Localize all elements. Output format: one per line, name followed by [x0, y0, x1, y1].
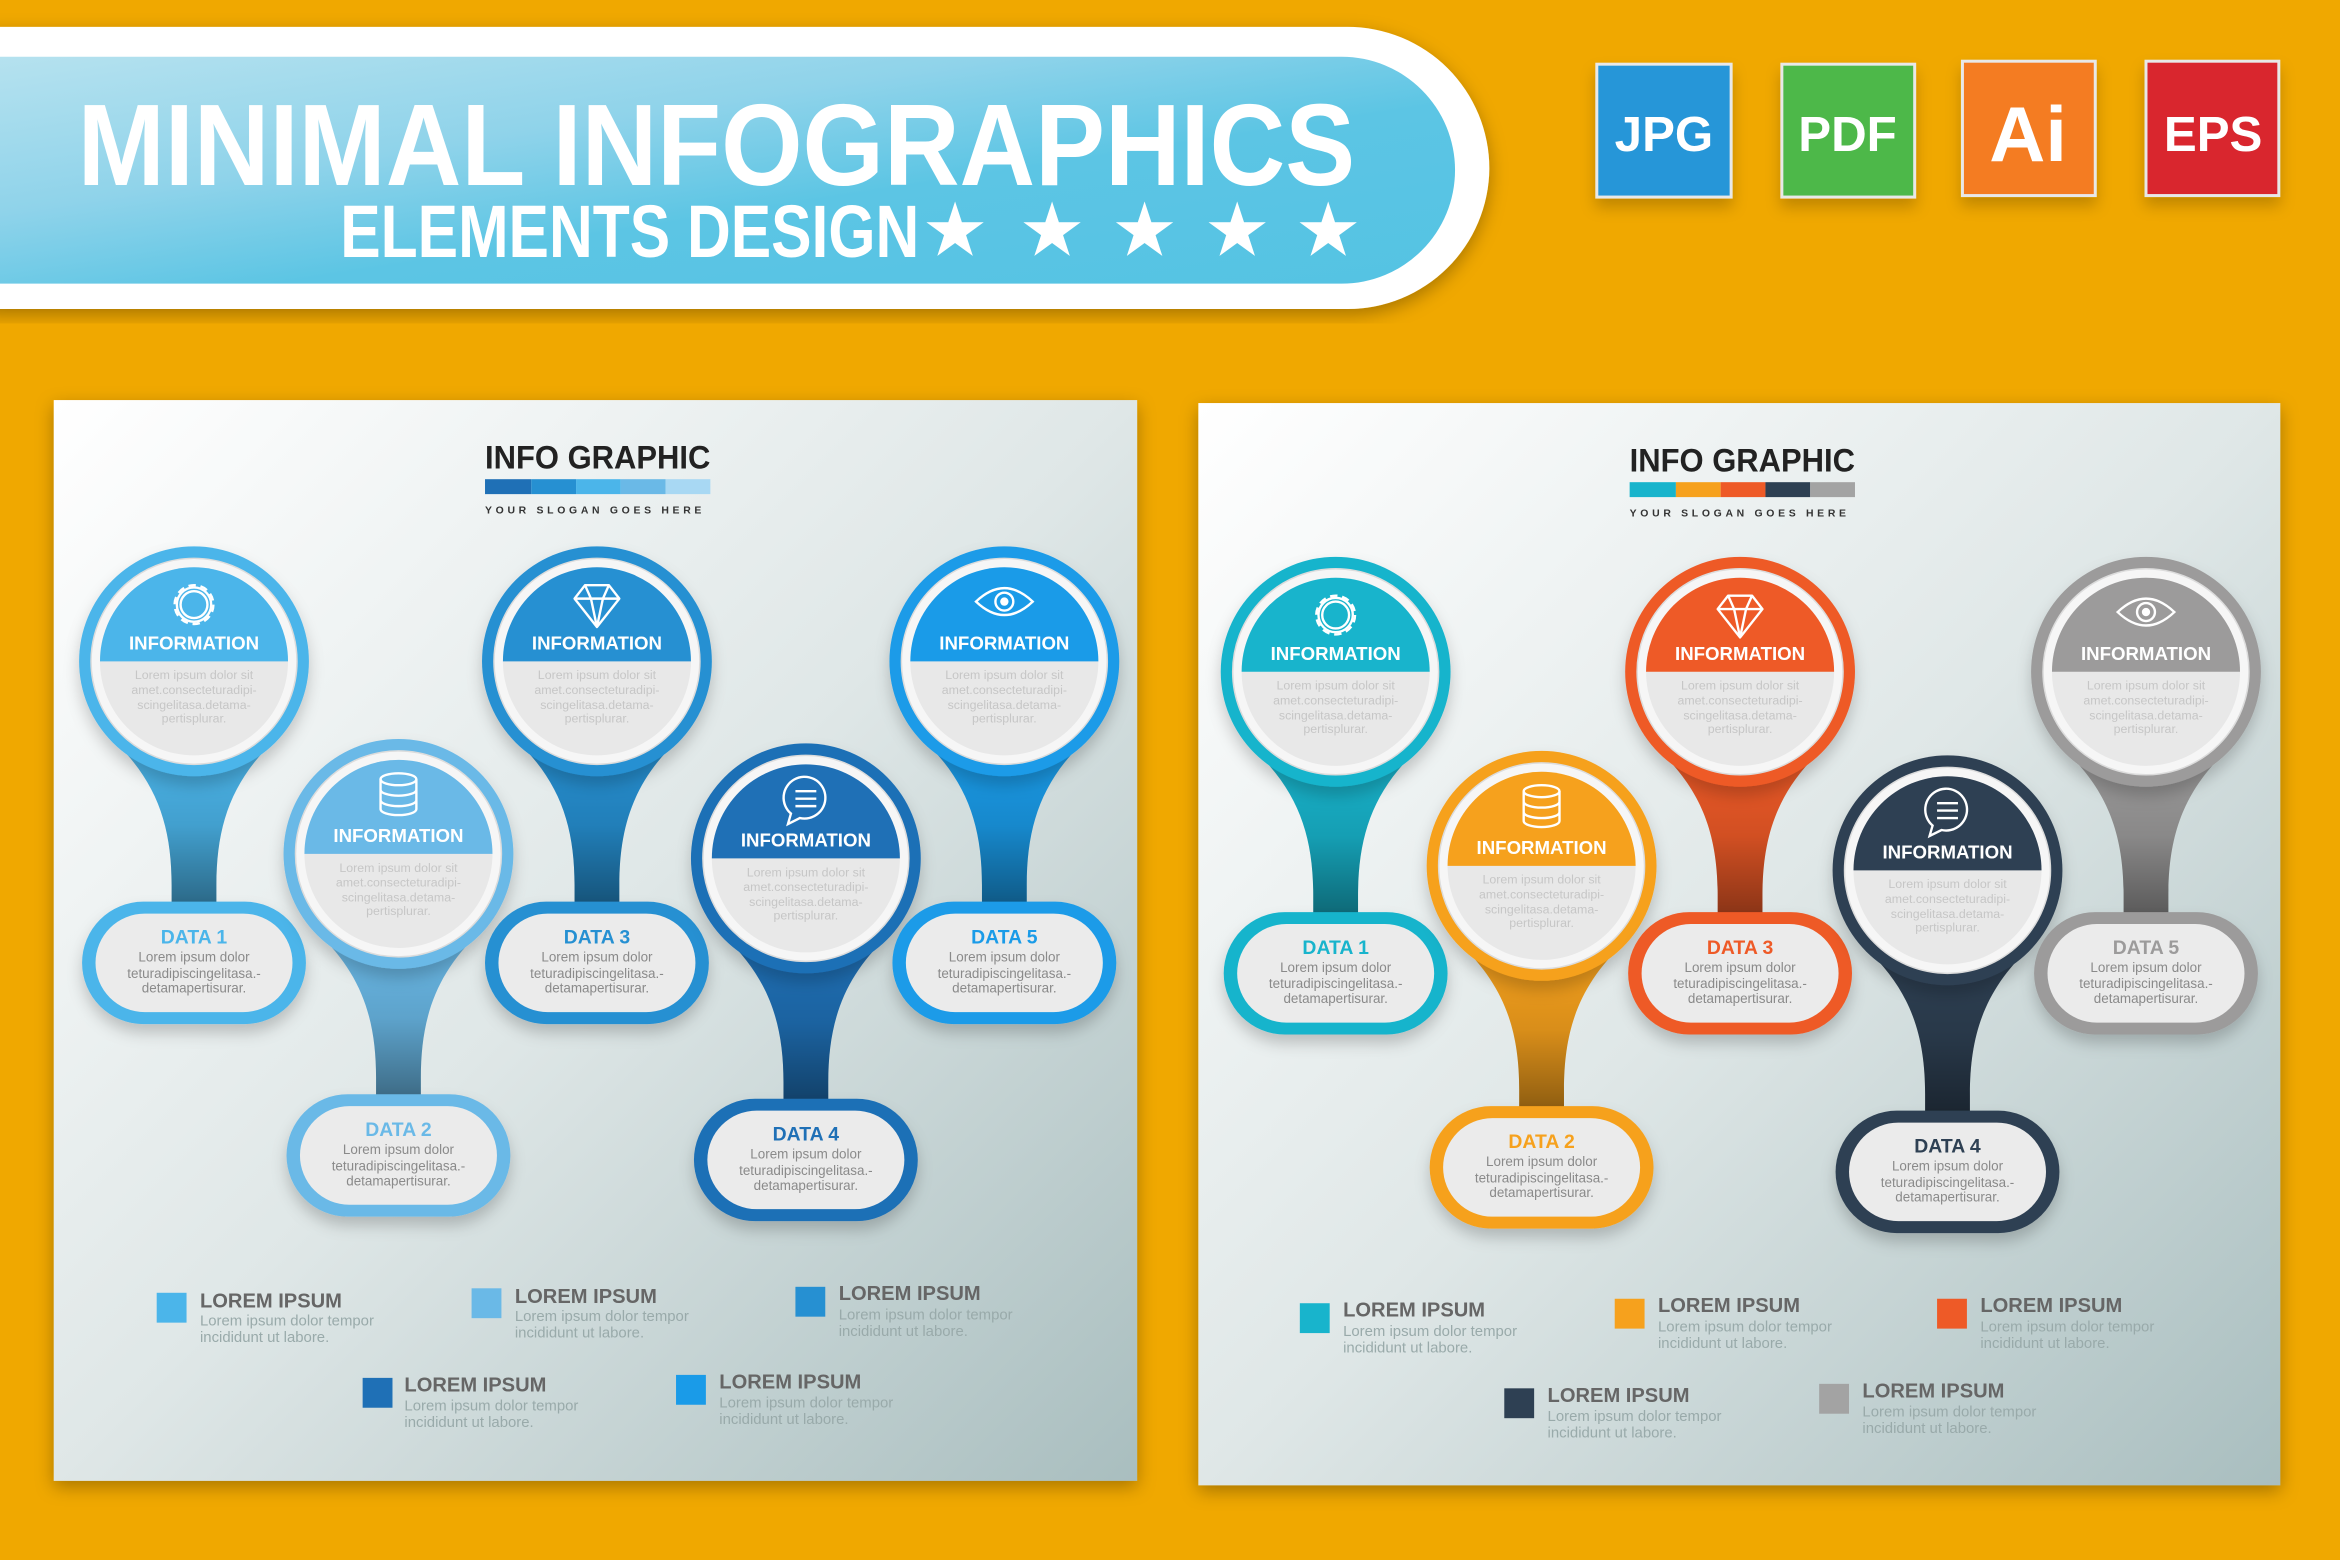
panel: blue infographic [54, 400, 1137, 1481]
icon: diamond [1718, 596, 1762, 637]
pin 5 (eye): Lorem ipsum dolor [949, 949, 1060, 964]
pin 5 (eye): Lorem ipsum dolor sit [945, 668, 1064, 682]
pin 4 (chat): teturadipiscingelitasa.- [739, 1163, 873, 1178]
pin 2 orange: Lorem ipsum dolor sit [1482, 873, 1601, 887]
legend: colorful panel: LOREM IPSUM [1343, 1300, 1485, 1322]
icon: diamond [575, 585, 619, 627]
pin 1 (gear): amet.consecteturadipi- [131, 683, 257, 697]
legend: blue panel: Lorem ipsum dolor tempor [200, 1313, 374, 1330]
pin 5 (eye): detamapertisurar. [952, 981, 1057, 996]
pin 3 (diamond): Lorem ipsum dolor [541, 949, 653, 964]
pin 3 (diamond): Lorem ipsum dolor sit [538, 668, 657, 682]
pin 4 navy: amet.consecteturadipi- [1885, 892, 2010, 906]
pin 3 (diamond): DATA 3 [564, 926, 630, 948]
subtitle: elements design with stars: ★ [1295, 186, 1362, 273]
subtitle: elements design with stars: ★ [1111, 186, 1178, 273]
legend: colorful panel: incididunt ut labore. [1862, 1420, 1992, 1437]
pin 2 (database): teturadipiscingelitasa.- [332, 1158, 465, 1173]
legend: blue panel: LOREM IPSUM [839, 1283, 981, 1305]
pin 3 (diamond): scingelitasa.detama- [540, 698, 654, 712]
pin 3 red: scingelitasa.detama- [1683, 709, 1797, 723]
pin 5 (eye): scingelitasa.detama- [948, 698, 1061, 712]
pin 4 navy: detamapertisurar. [1895, 1190, 2000, 1205]
pin 2 (database): INFORMATION [333, 825, 464, 846]
legend: colorful panel: Lorem ipsum dolor tempor [1862, 1404, 2036, 1421]
pin 5 gray: INFORMATION [2081, 643, 2211, 664]
pin 2 (database): Lorem ipsum dolor sit [339, 861, 458, 875]
subtitle: elements design with stars: ★ [1019, 186, 1086, 273]
pin 2 orange: pertisplurar. [1509, 916, 1574, 930]
legend: blue panel: incididunt ut labore. [515, 1325, 644, 1342]
pin 1 teal: Lorem ipsum dolor sit [1277, 679, 1395, 693]
pin 4 navy: INFORMATION [1882, 841, 2013, 862]
legend: blue panel: incididunt ut labore. [404, 1414, 534, 1431]
pin 1 (gear): pertisplurar. [162, 712, 226, 726]
pin 3 red: amet.consecteturadipi- [1677, 694, 1803, 708]
legend: blue panel: LOREM IPSUM [719, 1371, 861, 1393]
panel title: YOUR SLOGAN GOES HERE [485, 506, 706, 517]
pin 4 (chat): detamapertisurar. [754, 1178, 858, 1193]
pin 3 red: Lorem ipsum dolor sit [1681, 679, 1800, 693]
pin 1 (gear) [79, 546, 309, 1024]
pin 2 orange: INFORMATION [1477, 837, 1607, 858]
pin 1 (gear): Lorem ipsum dolor sit [135, 668, 254, 682]
pin 2 orange: DATA 2 [1508, 1131, 1575, 1153]
pin 3 (diamond): detamapertisurar. [545, 981, 649, 996]
pin 4 navy: DATA 4 [1914, 1135, 1981, 1157]
panel title [1630, 442, 1855, 520]
pin 4 (chat): Lorem ipsum dolor [750, 1146, 862, 1161]
legend: colorful panel: Lorem ipsum dolor tempor [1658, 1319, 1832, 1336]
legend: blue panel: LOREM IPSUM [515, 1286, 657, 1308]
pin 4 navy: scingelitasa.detama- [1891, 907, 2004, 921]
legend: colorful panel [1300, 1295, 2154, 1442]
legend: colorful panel: Lorem ipsum dolor tempor [1343, 1323, 1517, 1340]
pin 3 red: teturadipiscingelitasa.- [1673, 976, 1807, 991]
pin 2 orange: amet.consecteturadipi- [1479, 888, 1604, 902]
icon: database [381, 773, 416, 815]
icon: gear [1316, 596, 1355, 634]
icon: eye [976, 588, 1033, 615]
legend: colorful panel: LOREM IPSUM [1548, 1385, 1690, 1407]
pin 2 orange: detamapertisurar. [1489, 1185, 1594, 1200]
icon: EPS [2146, 61, 2279, 196]
pin 2 orange: Lorem ipsum dolor [1486, 1154, 1598, 1169]
pin 4 (chat) [691, 743, 921, 1221]
pin 4 (chat): pertisplurar. [774, 909, 838, 923]
panel title [485, 439, 710, 517]
icon: JPG [1597, 64, 1731, 197]
pin 2 (database) [284, 739, 513, 1217]
pin 2 (database): DATA 2 [365, 1119, 432, 1141]
panel title: INFO GRAPHIC [485, 439, 710, 476]
pin 4 navy: Lorem ipsum dolor [1892, 1158, 2004, 1173]
pin 3 (diamond): amet.consecteturadipi- [534, 683, 660, 697]
pin 3 (diamond) [482, 546, 712, 1024]
legend: colorful panel: incididunt ut labore. [1343, 1339, 1472, 1356]
icon: JPG: JPG [1615, 107, 1713, 162]
legend: colorful panel: incididunt ut labore. [1980, 1335, 2110, 1352]
panel: colorful infographic [1198, 403, 2280, 1485]
pin 5 gray: amet.consecteturadipi- [2083, 694, 2209, 708]
pin 2 (database): amet.consecteturadipi- [336, 876, 461, 890]
pin 3 (diamond): teturadipiscingelitasa.- [530, 966, 664, 981]
pin 5 (eye): teturadipiscingelitasa.- [938, 966, 1071, 981]
legend: blue panel: LOREM IPSUM [404, 1374, 546, 1396]
pin 5 (eye): amet.consecteturadipi- [942, 683, 1067, 697]
pin 2 orange: teturadipiscingelitasa.- [1475, 1170, 1608, 1185]
pin 5 (eye) [889, 546, 1119, 1024]
pin 4 (chat): INFORMATION [741, 829, 871, 850]
panel title: INFO GRAPHIC [1630, 442, 1855, 479]
pin 5 (eye): DATA 5 [971, 926, 1038, 948]
legend: blue panel: Lorem ipsum dolor tempor [404, 1398, 578, 1415]
pin 1 teal: detamapertisurar. [1283, 991, 1388, 1006]
legend: colorful panel: Lorem ipsum dolor tempor [1980, 1319, 2154, 1336]
pin 2 (database): scingelitasa.detama- [342, 891, 455, 905]
legend: colorful panel: incididunt ut labore. [1548, 1425, 1677, 1442]
pin 1 teal: DATA 1 [1302, 937, 1369, 959]
title: minimal infographics: MINIMAL INFOGRAPHICS [78, 80, 1355, 210]
legend: blue panel: Lorem ipsum dolor tempor [839, 1307, 1013, 1324]
pin 4 navy: Lorem ipsum dolor sit [1888, 877, 2007, 891]
pin 4 (chat): Lorem ipsum dolor sit [747, 865, 866, 879]
icon: Ai [1962, 61, 2095, 196]
pin 1 teal: Lorem ipsum dolor [1280, 960, 1392, 975]
pin 1 (gear): Lorem ipsum dolor [138, 949, 250, 964]
pin 4 (chat): amet.consecteturadipi- [743, 880, 868, 894]
legend: blue panel: Lorem ipsum dolor tempor [719, 1395, 893, 1412]
pin 1 (gear): detamapertisurar. [142, 981, 246, 996]
legend: blue panel: incididunt ut labore. [719, 1411, 849, 1428]
legend: blue panel: incididunt ut labore. [200, 1329, 329, 1346]
pin 3 (diamond): pertisplurar. [565, 712, 629, 726]
pin 3 red: INFORMATION [1675, 643, 1805, 664]
icon: database [1524, 785, 1560, 827]
pin 1 (gear): teturadipiscingelitasa.- [127, 966, 261, 981]
pin 5 gray: teturadipiscingelitasa.- [2079, 976, 2213, 991]
pin 3 red: Lorem ipsum dolor [1685, 960, 1796, 975]
subtitle: elements design with stars: ★ [1204, 186, 1271, 273]
pin 5 gray: DATA 5 [2113, 937, 2179, 959]
pin 3 red: pertisplurar. [1708, 722, 1772, 736]
pin 5 (eye): INFORMATION [939, 632, 1069, 653]
legend: blue panel: Lorem ipsum dolor tempor [515, 1308, 689, 1325]
icon: chat bubble [784, 777, 825, 824]
pin 5 gray [2031, 557, 2261, 1035]
pin 1 (gear): INFORMATION [129, 632, 259, 653]
pin 4 navy [1833, 755, 2062, 1233]
legend: colorful panel: incididunt ut labore. [1658, 1335, 1787, 1352]
legend: colorful panel: Lorem ipsum dolor tempor [1548, 1408, 1722, 1425]
icon: gear [175, 585, 213, 624]
pin 2 orange [1427, 751, 1657, 1229]
pin 3 red: DATA 3 [1707, 937, 1773, 959]
pin 3 (diamond): INFORMATION [532, 632, 662, 653]
legend: blue panel [157, 1283, 1013, 1431]
pin 1 (gear): DATA 1 [161, 926, 227, 948]
pin 5 gray: detamapertisurar. [2094, 991, 2198, 1006]
icon: EPS: EPS [2164, 107, 2262, 162]
pin 1 teal [1221, 557, 1451, 1035]
legend: blue panel: incididunt ut labore. [839, 1323, 968, 1340]
pin 4 (chat): scingelitasa.detama- [749, 895, 863, 909]
pin 5 gray: scingelitasa.detama- [2089, 709, 2203, 723]
pin 2 orange: scingelitasa.detama- [1485, 903, 1598, 917]
legend: blue panel: LOREM IPSUM [200, 1291, 342, 1313]
pin 1 teal: teturadipiscingelitasa.- [1269, 976, 1402, 991]
pin 4 navy: pertisplurar. [1915, 921, 1980, 935]
panel title: YOUR SLOGAN GOES HERE [1630, 509, 1851, 520]
subtitle: elements design with stars [340, 186, 1362, 273]
pin 1 teal: pertisplurar. [1303, 722, 1368, 736]
pin 2 (database): Lorem ipsum dolor [343, 1142, 455, 1157]
legend: colorful panel: LOREM IPSUM [1658, 1295, 1800, 1317]
icon: chat bubble [1925, 789, 1967, 836]
pin 4 (chat): DATA 4 [773, 1124, 839, 1146]
pin 1 teal: scingelitasa.detama- [1279, 709, 1392, 723]
pin 4 navy: teturadipiscingelitasa.- [1881, 1175, 2014, 1190]
icon: Ai: Ai [1989, 92, 2067, 178]
icon: PDF: PDF [1798, 107, 1897, 162]
header banner [0, 27, 1489, 309]
pin 2 (database): detamapertisurar. [346, 1173, 451, 1188]
pin 1 teal: amet.consecteturadipi- [1273, 694, 1398, 708]
pin 2 (database): pertisplurar. [366, 904, 431, 918]
pin 3 red [1625, 557, 1855, 1035]
pin 5 gray: pertisplurar. [2114, 722, 2178, 736]
pin 5 gray: Lorem ipsum dolor [2090, 960, 2202, 975]
pin 5 (eye): pertisplurar. [972, 712, 1037, 726]
subtitle: elements design with stars: ★ [922, 186, 989, 273]
icon: eye [2118, 599, 2174, 625]
icon: PDF [1782, 64, 1915, 197]
subtitle: elements design with stars: ELEMENTS DESIGN [340, 189, 919, 273]
pin 3 red: detamapertisurar. [1688, 991, 1792, 1006]
legend: colorful panel: LOREM IPSUM [1980, 1295, 2122, 1317]
pin 1 (gear): scingelitasa.detama- [137, 698, 251, 712]
pin 1 teal: INFORMATION [1271, 643, 1401, 664]
legend: colorful panel: LOREM IPSUM [1862, 1380, 2004, 1402]
pin 5 gray: Lorem ipsum dolor sit [2087, 679, 2206, 693]
